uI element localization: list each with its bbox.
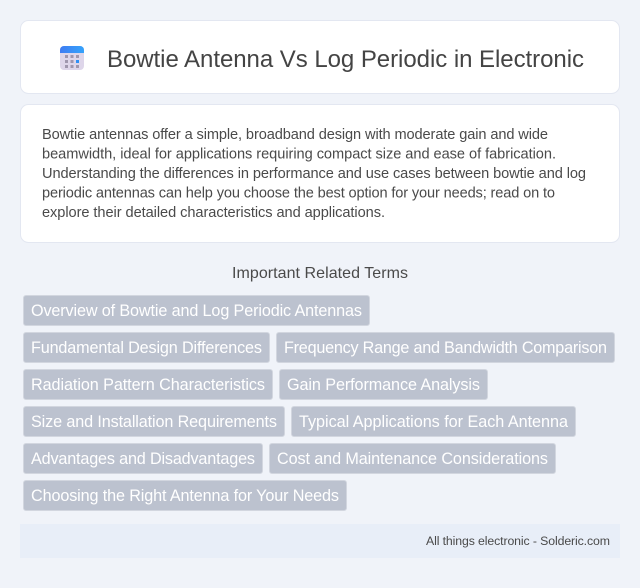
tag: design differences: Fundamental Design Differences [31,339,262,357]
tag: typical applications: Typical Applications for Each Antenna [299,413,568,431]
description text: Understanding the differences in performance and use cases between bowtie and log [42,166,586,182]
tag: overview [24,296,370,326]
tag list [24,296,614,510]
tag: cost and maintenance [270,444,556,474]
tag: gain performance: Gain Performance Analysis [287,376,480,394]
tag: design differences [24,332,270,362]
description text: beamwidth, ideal for applications requiring compact size and ease of fabrication. [42,146,556,162]
tag: choosing antenna: Choosing the Right Antenna for Your Needs [31,487,339,505]
tag: size and installation: Size and Installation Requirements [31,413,277,431]
heading: important related terms: Important Related Terms [232,265,408,282]
footer text: All things electronic - Solderic.com [426,534,610,548]
tag: gain performance [280,370,488,400]
tag: radiation pattern: Radiation Pattern Characteristics [31,376,265,394]
panel: title card [20,20,620,94]
tag: frequency range [276,332,614,362]
description text: Bowtie antennas offer a simple, broadband design with moderate gain and wide [42,127,548,143]
tag: radiation pattern [24,370,272,400]
description text [42,127,586,221]
tag: advantages [24,444,262,474]
tag: advantages: Advantages and Disadvantages [31,450,255,468]
description text: explore their detailed characteristics and applications. [42,205,385,221]
icon: calendar [60,46,84,70]
tag: frequency range: Frequency Range and Bandwidth Comparison [284,339,607,357]
description text: periodic antennas can help you choose the best option for your needs; read on to [42,186,555,202]
tag: cost and maintenance: Cost and Maintenance Considerations [277,450,548,468]
tag: size and installation [24,406,284,436]
footer bar [20,524,620,558]
tag: choosing antenna [24,480,346,510]
tag: overview: Overview of Bowtie and Log Periodic Antennas [31,302,362,320]
tag: typical applications [292,406,576,436]
title: Bowtie Antenna Vs Log Periodic in Electronic [107,46,584,73]
panel: description [20,104,620,242]
